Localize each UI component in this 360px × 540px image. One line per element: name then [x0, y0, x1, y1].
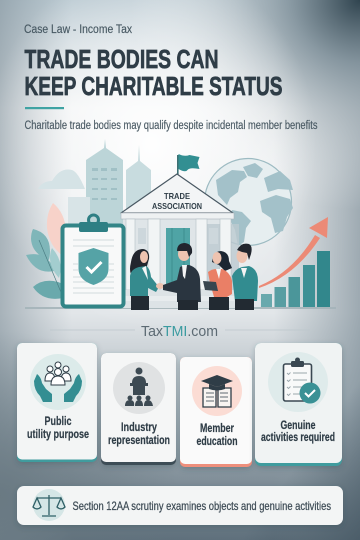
clipboard — [62, 215, 124, 306]
card: public utility — [17, 343, 97, 462]
man in teal — [232, 244, 258, 310]
card label — [27, 416, 89, 441]
bar chart — [261, 251, 330, 307]
card label: Genuine — [280, 420, 316, 432]
title: TRADE BODIES CAN — [24, 44, 218, 74]
ground line — [25, 307, 336, 309]
icon: book and cap — [201, 375, 233, 407]
icon: scales — [33, 495, 65, 516]
card label — [196, 423, 238, 448]
footer panel — [17, 486, 343, 525]
building label: ASSOCIATION — [152, 201, 202, 211]
icon: checklist — [284, 358, 320, 404]
growth arrow — [259, 217, 328, 288]
salmon leaf — [47, 203, 66, 256]
card: member education — [180, 357, 252, 467]
card: genuine activities — [255, 343, 342, 466]
eyebrow: Case Law - Income Tax — [24, 24, 132, 36]
illustration — [25, 139, 336, 310]
city skyline — [38, 139, 151, 237]
accent rule — [25, 107, 64, 109]
card label: education — [196, 436, 238, 448]
flag — [177, 154, 200, 175]
globe — [204, 158, 293, 246]
card label — [261, 420, 335, 444]
teal leaves — [26, 229, 63, 299]
shield — [78, 248, 108, 285]
card label — [108, 422, 170, 447]
building label: TRADE — [164, 191, 190, 201]
woman in salmon — [203, 251, 232, 310]
building label — [152, 191, 202, 211]
logo divider — [50, 329, 310, 331]
woman in teal — [130, 249, 164, 310]
card label: representation — [108, 435, 170, 447]
association building — [116, 154, 242, 308]
icon: people in hands — [34, 362, 82, 402]
card label: utility purpose — [27, 429, 89, 441]
icon: speaker at podium — [125, 368, 153, 406]
card: industry representation — [101, 353, 176, 465]
card label: Public — [44, 416, 72, 428]
man in dark suit — [163, 243, 201, 310]
logo: TaxTMI.com — [141, 323, 218, 340]
card label: Industry — [121, 422, 157, 434]
card label: activities required — [261, 432, 335, 444]
title — [24, 44, 282, 101]
card label: Member — [200, 423, 234, 435]
